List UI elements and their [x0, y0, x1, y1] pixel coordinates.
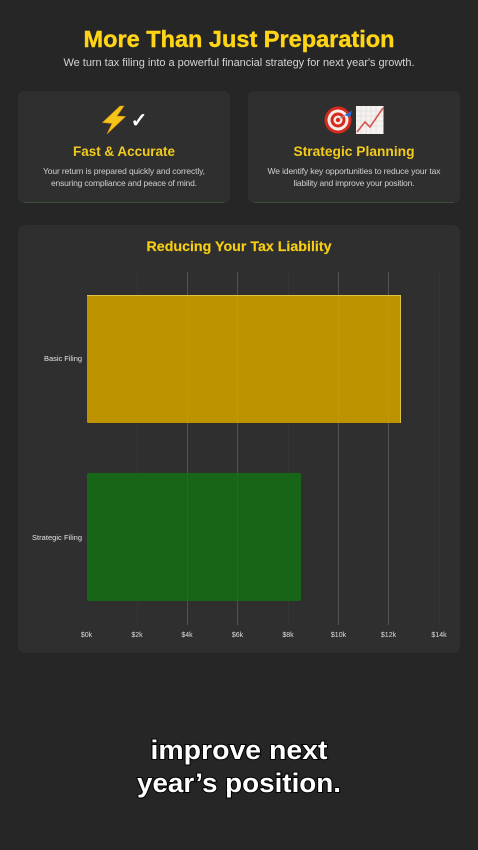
text: fast and accurate description: ensuring compliance and peace of mind.: [51, 178, 197, 188]
heading: fast and accurate: Fast & Accurate: [73, 144, 175, 159]
x axis labels: $12k: [381, 632, 397, 639]
x axis labels: $14k: [431, 632, 447, 639]
text: fast and accurate description: Your return is prepared quickly and correctly,: [43, 166, 205, 176]
text: strategic planning description: We identify key opportunities to reduce your tax: [268, 166, 441, 176]
x axis labels: $6k: [232, 632, 244, 639]
panel: strategic planning: [248, 91, 460, 203]
subtitle: We turn tax filing into a powerful financial strategy for next year's growth.: [64, 57, 414, 69]
heading: strategic planning: Strategic Planning: [294, 144, 414, 159]
icon: lightning bolt: [102, 106, 126, 134]
x axis labels: $4k: [181, 632, 193, 639]
text: strategic planning description: [268, 166, 441, 188]
icon: rising chart: [356, 106, 384, 134]
chart title: Reducing Your Tax Liability: [146, 239, 332, 254]
grid lines: [138, 272, 440, 625]
x axis labels: $2k: [131, 632, 143, 639]
category labels: [32, 354, 82, 542]
bar: strategic filing: [87, 473, 301, 601]
category labels: Basic Filing: [44, 354, 82, 363]
caption: [137, 735, 341, 798]
x axis labels: $0k: [81, 632, 93, 639]
category labels: Strategic Filing: [32, 533, 82, 542]
caption: year’s position.: [137, 768, 341, 798]
text: strategic planning description: liability and improve your position.: [294, 178, 414, 188]
icon: target: [324, 106, 352, 134]
icon: check mark: ✓: [131, 108, 147, 132]
panel: bar chart: [18, 225, 460, 653]
x axis labels: [81, 632, 447, 639]
x axis labels: $10k: [331, 632, 347, 639]
title: More Than Just Preparation: [84, 26, 395, 52]
x axis labels: $8k: [282, 632, 294, 639]
panel: fast and accurate: [18, 91, 230, 203]
text: fast and accurate description: [43, 166, 205, 188]
caption: improve next: [150, 735, 328, 765]
bar: basic filing: [87, 295, 401, 423]
